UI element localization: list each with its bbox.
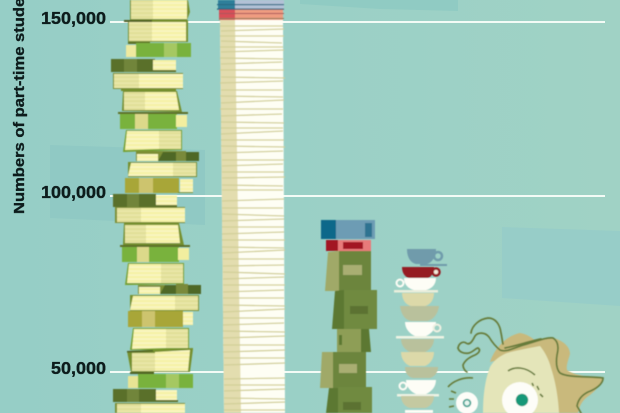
book 11 — [125, 178, 193, 193]
box 2 — [332, 290, 377, 329]
hair back — [490, 333, 603, 413]
grey cup 2 — [401, 339, 434, 352]
book 17 — [138, 284, 201, 294]
cartoon student face — [448, 318, 603, 413]
book 14 — [123, 223, 184, 245]
background panel right — [502, 227, 620, 306]
tick label 50,000: 50,000 — [51, 358, 106, 378]
white cup 3 — [397, 380, 439, 396]
hair strands — [458, 318, 603, 413]
cream cup — [402, 293, 434, 306]
head — [483, 346, 559, 413]
book 20 — [130, 328, 189, 350]
book 8 — [123, 130, 182, 152]
small eye — [456, 392, 478, 413]
book 10 — [128, 162, 197, 177]
book 1 — [130, 0, 190, 20]
stack of boxes — [320, 220, 377, 413]
book 2 — [124, 20, 188, 42]
book 4 — [111, 59, 176, 72]
gridline 150,000 — [110, 21, 605, 23]
gridline 50,000 — [110, 371, 605, 373]
grey cup — [400, 306, 439, 321]
book 18 — [130, 295, 199, 311]
red cup — [402, 267, 440, 278]
box 1 — [325, 251, 371, 291]
book 3 — [126, 42, 191, 57]
stack of books — [111, 0, 201, 413]
blue cup — [407, 249, 447, 266]
red book — [326, 240, 371, 251]
book 9 — [136, 151, 199, 161]
book 13 — [115, 207, 185, 223]
book 24 — [115, 403, 185, 413]
blue book — [321, 220, 375, 239]
blue sheets — [217, 0, 284, 9]
tick label 100,000: 100,000 — [41, 182, 106, 202]
book 22 — [128, 372, 193, 388]
gridline 100,000 — [110, 195, 605, 197]
white cup 4 — [405, 410, 433, 413]
book 19 — [128, 311, 193, 327]
eyebrows and lashes — [448, 368, 543, 407]
book 5 — [113, 73, 183, 89]
book 6 — [121, 89, 182, 112]
stack of cups — [394, 249, 447, 413]
big eye — [502, 382, 538, 413]
stack of papers — [217, 0, 285, 413]
background panel left — [50, 145, 205, 225]
book 12 — [113, 194, 177, 207]
tick label 150,000: 150,000 — [41, 8, 106, 28]
white cup 2 — [396, 322, 444, 338]
red sheets — [217, 8, 284, 20]
book 16 — [125, 263, 184, 285]
grey cup 3 — [405, 367, 438, 378]
grey cup 4 — [401, 396, 434, 408]
box 5 — [326, 387, 372, 413]
book 23 — [113, 389, 178, 402]
cream cup 2 — [401, 352, 434, 366]
white cup — [394, 278, 438, 292]
white sheets — [220, 20, 285, 413]
box 3 — [337, 329, 371, 352]
box 4 — [320, 352, 366, 388]
y-axis title: Numbers of part-time students — [12, 0, 28, 214]
book 15 — [120, 245, 190, 262]
book 21 — [127, 348, 193, 372]
background panel top — [300, 0, 458, 11]
book 7 — [118, 112, 188, 129]
